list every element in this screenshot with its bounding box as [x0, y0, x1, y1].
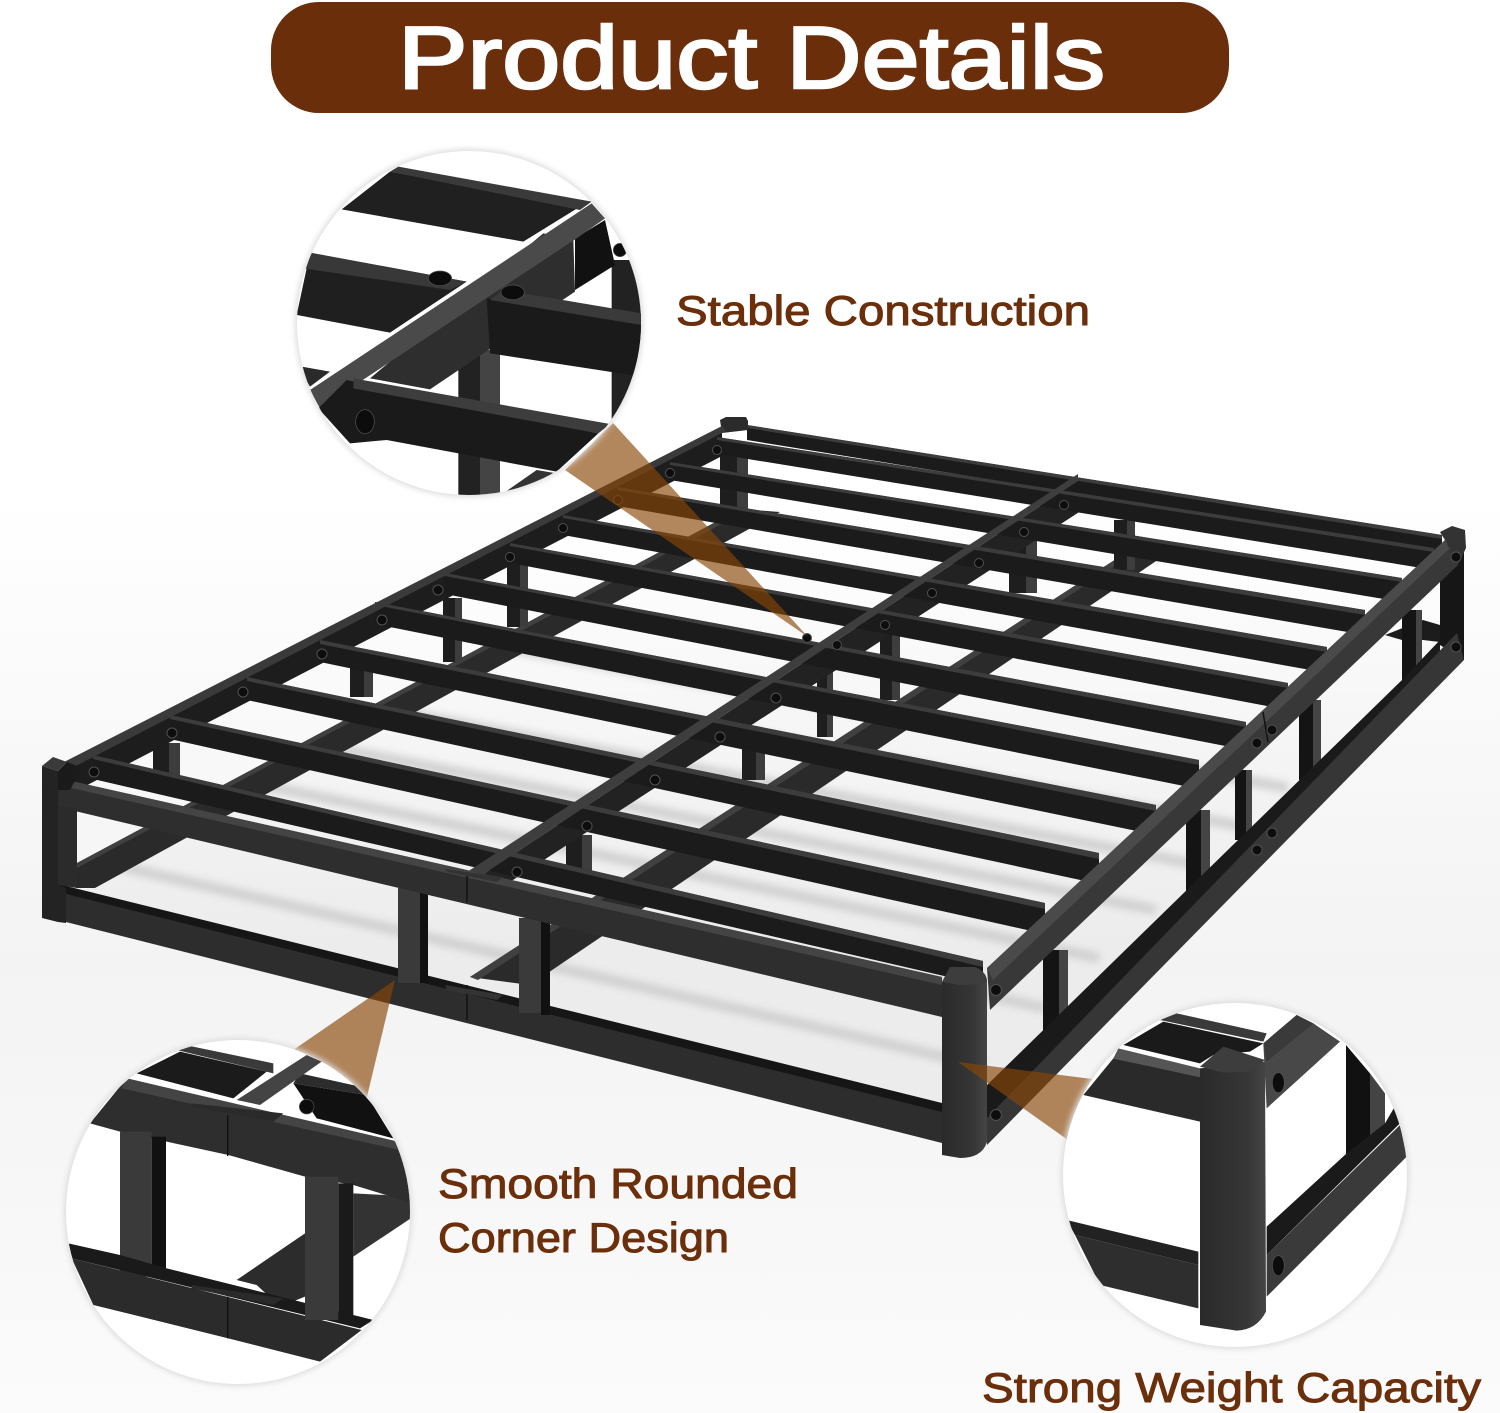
- detail circle: rounded corner design: [64, 1038, 413, 1386]
- right side legs: [1043, 535, 1464, 1035]
- back corner cap: [720, 417, 748, 433]
- callout wedge: stable construction: [565, 423, 808, 637]
- inner legs: [153, 450, 1135, 873]
- label: smooth rounded corner design: Smooth Rounded: [438, 1160, 798, 1207]
- slats: [93, 425, 1442, 985]
- label: stable construction: Stable Construction: [676, 287, 1090, 334]
- front corner post: [942, 967, 987, 1158]
- front legs: [398, 888, 550, 1015]
- label: smooth rounded corner design: [438, 1160, 798, 1261]
- title banner: Product Details: [398, 8, 1105, 107]
- detail circle: stable construction: [295, 149, 643, 497]
- floor under frame: [118, 654, 1292, 1102]
- right top rail: [987, 526, 1466, 1010]
- bed frame illustration: [42, 417, 1466, 1158]
- label: smooth rounded corner design: Corner Design: [438, 1214, 729, 1261]
- callout wedge: rounded corner: [270, 980, 395, 1105]
- callout wedge: weight capacity: [958, 1062, 1100, 1145]
- front top rail: [58, 778, 942, 1017]
- centre spine: [467, 474, 1078, 888]
- front lower rail: [58, 884, 942, 1143]
- bolts: [89, 446, 1461, 1120]
- title banner: [271, 2, 1229, 113]
- left rail inner face: [70, 432, 722, 794]
- centre beam under spine: [467, 481, 1090, 895]
- under beams: [77, 509, 1440, 985]
- right lower rail: [987, 633, 1464, 1145]
- left top rail: [64, 426, 726, 769]
- detail circle: strong weight capacity: [1061, 1001, 1409, 1349]
- left corner post: [42, 757, 82, 923]
- label: strong weight capacity: Strong Weight Capacity: [982, 1364, 1481, 1411]
